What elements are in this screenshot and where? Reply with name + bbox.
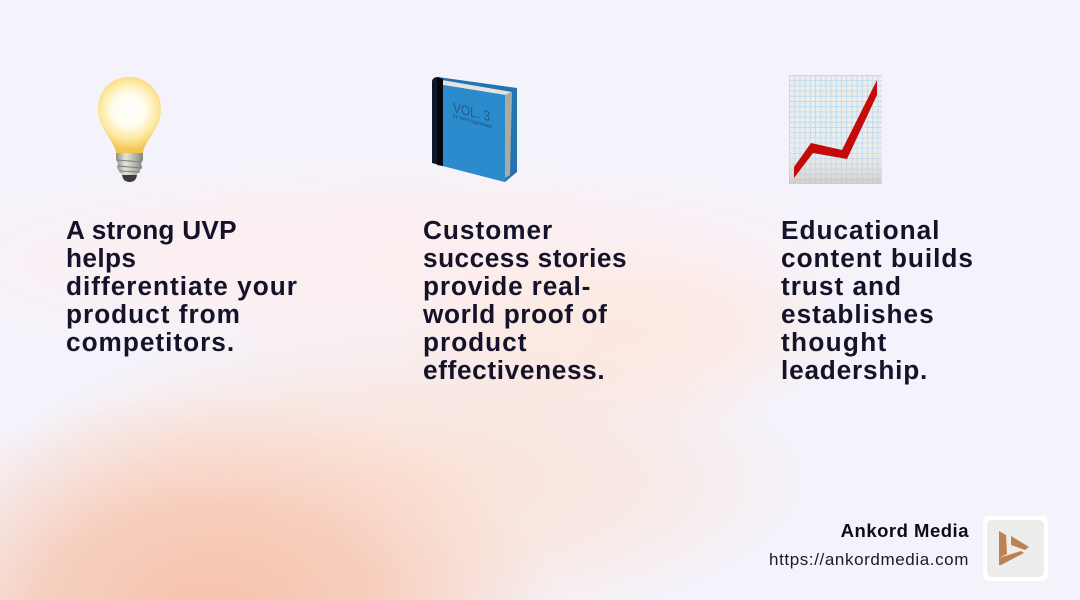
text: educational content: Educational [781,215,940,245]
text: unique value proposition [66,215,298,357]
text: unique value proposition: competitors. [66,327,235,357]
text: educational content: establishes [781,299,935,329]
text: customer success stories: provide real- [423,271,591,301]
text: unique value proposition: product from [66,299,241,329]
text: customer success stories: Customer [423,215,553,245]
icon: light bulb [98,77,161,182]
text: customer success stories: product [423,327,527,357]
brand name: Ankord Media [841,520,969,541]
text: unique value proposition: differentiate your [66,271,298,301]
text: customer success stories: effectiveness. [423,355,605,385]
icon: rising chart [789,75,882,184]
text: educational content [781,215,974,385]
text: educational content: thought [781,327,888,357]
text: educational content: leadership. [781,355,928,385]
logo badge [983,516,1048,581]
icon: blue book [432,77,517,182]
brand url: https://ankordmedia.com [769,550,969,569]
text: customer success stories: world proof of [423,299,607,329]
icon: blue book: VOL. 3 [453,99,490,124]
text: educational content: trust and [781,271,902,301]
text: customer success stories: success stories [423,243,627,273]
text: unique value proposition: helps [66,243,136,273]
text: unique value proposition: A strong UVP [66,215,237,245]
text: educational content: content builds [781,243,974,273]
icon: blue book: by John Appleseed [453,113,492,131]
text: customer success stories [422,215,627,385]
